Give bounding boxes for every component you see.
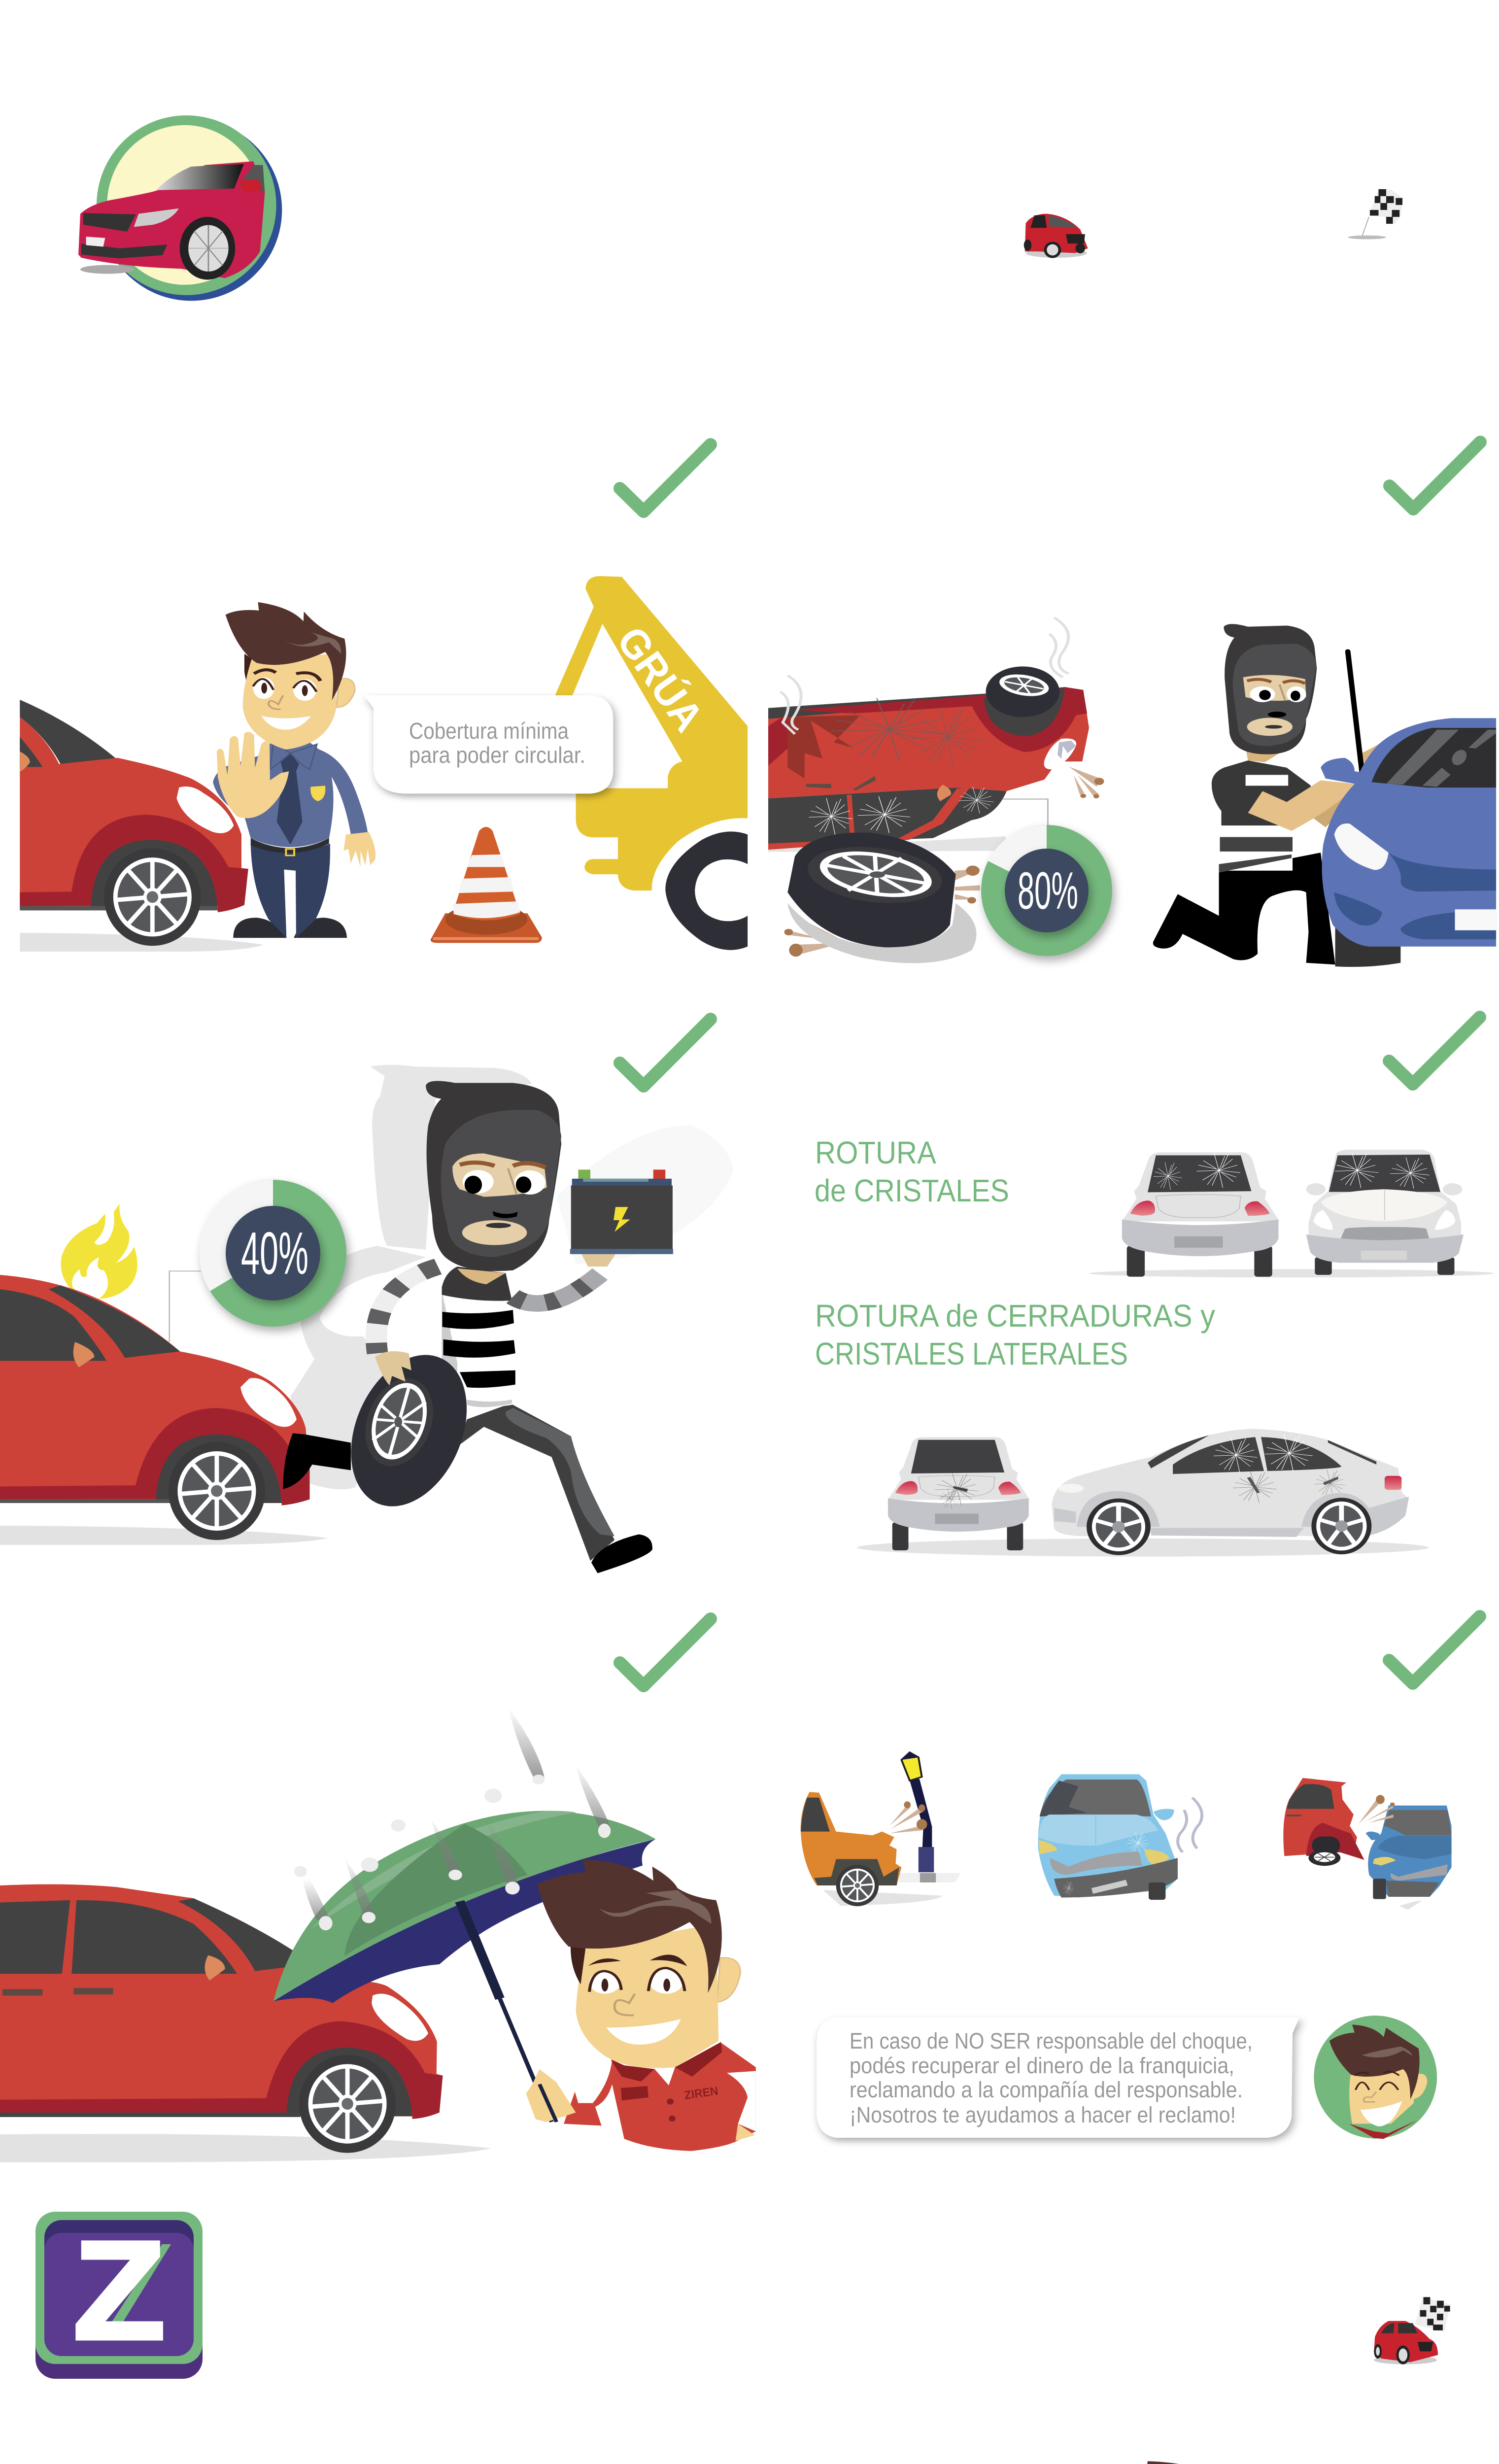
- heading: rotura de cerraduras y cristales laterales: ROTURA de CERRADURAS y: [815, 1298, 1215, 1334]
- ground shadow lower: [857, 1539, 1429, 1557]
- mascot avatar: [1314, 2016, 1437, 2139]
- panel: minimum coverage, policeman and tow truck: [20, 576, 748, 952]
- callout: franchise claim: [817, 2018, 1299, 2138]
- traffic cone: [431, 827, 542, 943]
- small red car icon top: [1024, 214, 1088, 258]
- flame: [61, 1203, 137, 1299]
- side view car with broken windows: [1052, 1429, 1409, 1555]
- tow truck: [555, 576, 748, 950]
- car shadow: [0, 1526, 328, 1545]
- mascot with umbrella: [526, 1860, 756, 2151]
- red and blue cars colliding: [1283, 1778, 1452, 1910]
- small car with checkered flag: [1374, 2297, 1451, 2364]
- Z brand logo: [35, 2212, 203, 2379]
- red car: [0, 1884, 443, 2153]
- ghost silhouette: [290, 1065, 733, 1489]
- debris headlight: [1069, 767, 1104, 798]
- panel: collision scenes: [801, 1752, 1452, 1910]
- check mark 4: [1389, 1017, 1480, 1084]
- callout: minimum coverage: Cobertura mínima: [409, 718, 569, 744]
- check mark 6: [1389, 1616, 1480, 1683]
- mascot thumbs up: [1036, 2461, 1425, 2464]
- panel: broken glass and locks: [857, 1150, 1494, 1557]
- smoke: [781, 617, 1069, 734]
- shirt brand on mascot: ZIREN: [683, 2085, 719, 2102]
- callout: minimum coverage: [364, 695, 613, 794]
- car shadow: [20, 933, 264, 952]
- blue car: [1321, 718, 1496, 947]
- callout: minimum coverage: para poder circular.: [409, 742, 585, 768]
- connector line: [170, 1271, 201, 1342]
- panel: hail protection, umbrella: [0, 1707, 756, 2162]
- logo badge: red car in circle: [78, 115, 282, 301]
- overturned red car: [768, 666, 1089, 850]
- thief 1: [1153, 624, 1400, 967]
- donut chart 40%: 40%: [241, 1220, 308, 1287]
- red car: [0, 1275, 309, 1540]
- donut chart 80%: 80%: [1018, 861, 1078, 920]
- red car front: [20, 700, 248, 946]
- policeman: [213, 602, 375, 938]
- heading: rotura de cristales: ROTURA: [815, 1135, 936, 1170]
- rear view car with broken window: [1122, 1152, 1279, 1277]
- panel: total loss, overturned car: [768, 617, 1496, 967]
- check mark 1: [620, 445, 711, 512]
- Z brand logo: Z: [73, 2212, 166, 2369]
- donut chart 40%: [200, 1180, 346, 1327]
- claim text: podés recuperar el dinero de la franquicia,: [850, 2053, 1234, 2078]
- donut chart 80%: [981, 825, 1112, 956]
- claim text: En caso de NO SER responsable del choque,: [850, 2028, 1253, 2053]
- blue car front with dent: [1038, 1774, 1202, 1900]
- car battery: [570, 1169, 673, 1254]
- claim text: ¡Nosotros te ayudamos a hacer el reclamo!: [850, 2102, 1236, 2127]
- ground shadow: [768, 836, 1006, 852]
- loose tire: [787, 832, 977, 963]
- car shadow: [0, 2134, 491, 2162]
- ground shadow upper: [1089, 1269, 1494, 1277]
- running thief: [283, 1081, 652, 1573]
- heading: rotura de cerraduras y cristales laterales: CRISTALES LATERALES: [815, 1336, 1128, 1371]
- check mark 2: [1390, 442, 1480, 509]
- check mark 5: [620, 1619, 711, 1686]
- debris tire: [784, 865, 982, 957]
- heading: rotura de cristales: de CRISTALES: [815, 1173, 1009, 1208]
- heading: rotura de cristales: [815, 1135, 1009, 1208]
- checkered flag icon top: [1348, 189, 1403, 239]
- tow truck label: GRÚA: [608, 618, 713, 740]
- claim text: [850, 2028, 1253, 2127]
- head: [1083, 2461, 1360, 2464]
- check mark 3: [620, 1019, 711, 1086]
- umbrella: [273, 1811, 656, 2122]
- orange car hitting lamp post: [801, 1752, 961, 1906]
- hailstones: [294, 1707, 611, 1930]
- rear view car with broken lock: [888, 1437, 1030, 1550]
- connector line: [1003, 799, 1048, 825]
- front view car with broken window: [1306, 1150, 1464, 1275]
- claim text: reclamando a la compañía del responsable.: [850, 2077, 1243, 2102]
- heading: rotura de cerraduras y cristales laterales: [815, 1298, 1215, 1371]
- panel: theft, fire and running thief: [0, 1065, 733, 1573]
